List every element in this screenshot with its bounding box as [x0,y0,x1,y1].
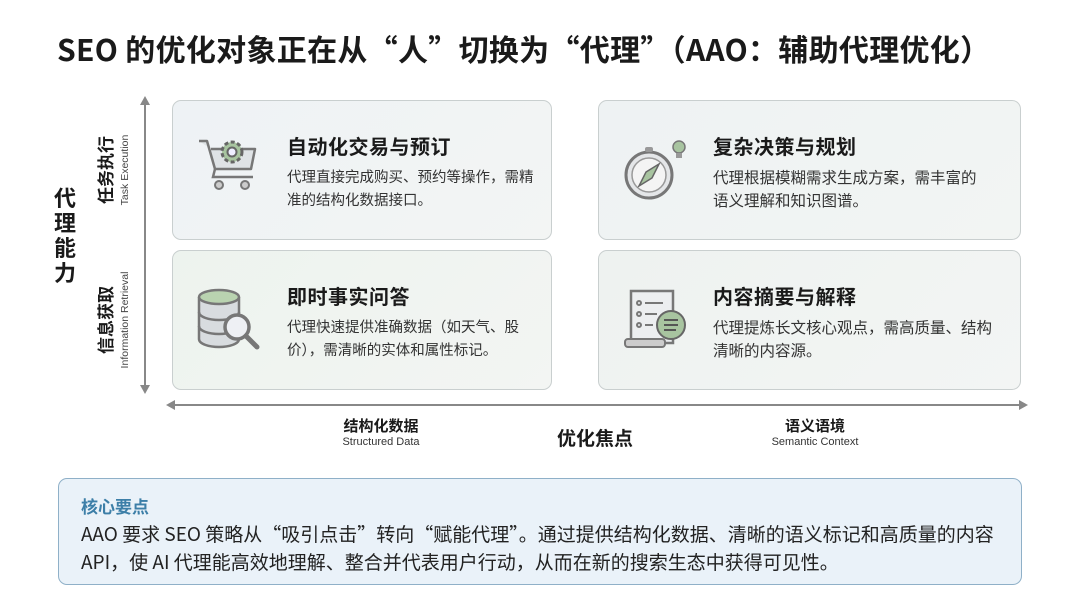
y label: task execution: 任务执行 [97,136,116,204]
x label: semantic context: Semantic Context [772,436,858,448]
y label: task execution [97,135,131,206]
y label: information retrieval [97,272,131,368]
key takeaways box [58,478,1022,585]
y label: information retrieval: Information Retrieval [119,272,131,368]
heading: 核心要点 [81,498,149,517]
heading: 复杂决策与规划 [713,137,856,159]
text: API，使 AI 代理能高效地理解、整合并代表用户行动，从而在新的搜索生态中获得可见性。 [81,548,839,575]
x label: structured data [342,418,420,448]
card: content summary [598,250,1021,390]
title: SEO 的优化对象正在从“人”切换为“代理”（AAO：辅助代理优化） [57,26,990,70]
text: 代理根据模糊需求生成方案，需丰富的语义理解和知识图谱。 [713,170,977,210]
vertical arrow [140,96,150,394]
card: complex decisions [598,100,1021,240]
text [81,520,994,575]
icon: document with chat bubble [624,290,686,348]
card: automated transactions [172,100,552,240]
heading: 内容摘要与解释 [713,287,856,309]
x label: semantic context [772,418,858,448]
card: instant facts [172,250,552,390]
text: AAO 要求 SEO 策略从“吸引点击”转向“赋能代理”。通过提供结构化数据、清晰的语义标记和高质量的内容 [81,520,994,547]
x label: semantic context: 语义语境 [785,418,845,435]
text: 代理直接完成购买、预约等操作，需精准的结构化数据接口。 [287,170,534,209]
text: 代理提炼长文核心观点，需高质量、结构清晰的内容源。 [713,320,992,360]
icon: compass with bulb [624,140,686,200]
y axis label: 代理能力 [54,186,76,286]
icon: cart with gear [199,140,256,190]
y label: information retrieval: 信息获取 [97,286,116,354]
y label: task execution: Task Execution [119,135,131,205]
icon: database with magnifier [198,288,260,350]
heading: 即时事实问答 [287,287,410,309]
text: 代理快速提供准确数据（如天气、股价），需清晰的实体和属性标记。 [287,320,519,359]
x label: structured data: 结构化数据 [343,418,418,435]
heading: 自动化交易与预订 [287,137,451,159]
x label: structured data: Structured Data [342,436,420,448]
x axis label: 优化焦点 [557,429,633,450]
horizontal arrow [166,400,1028,410]
